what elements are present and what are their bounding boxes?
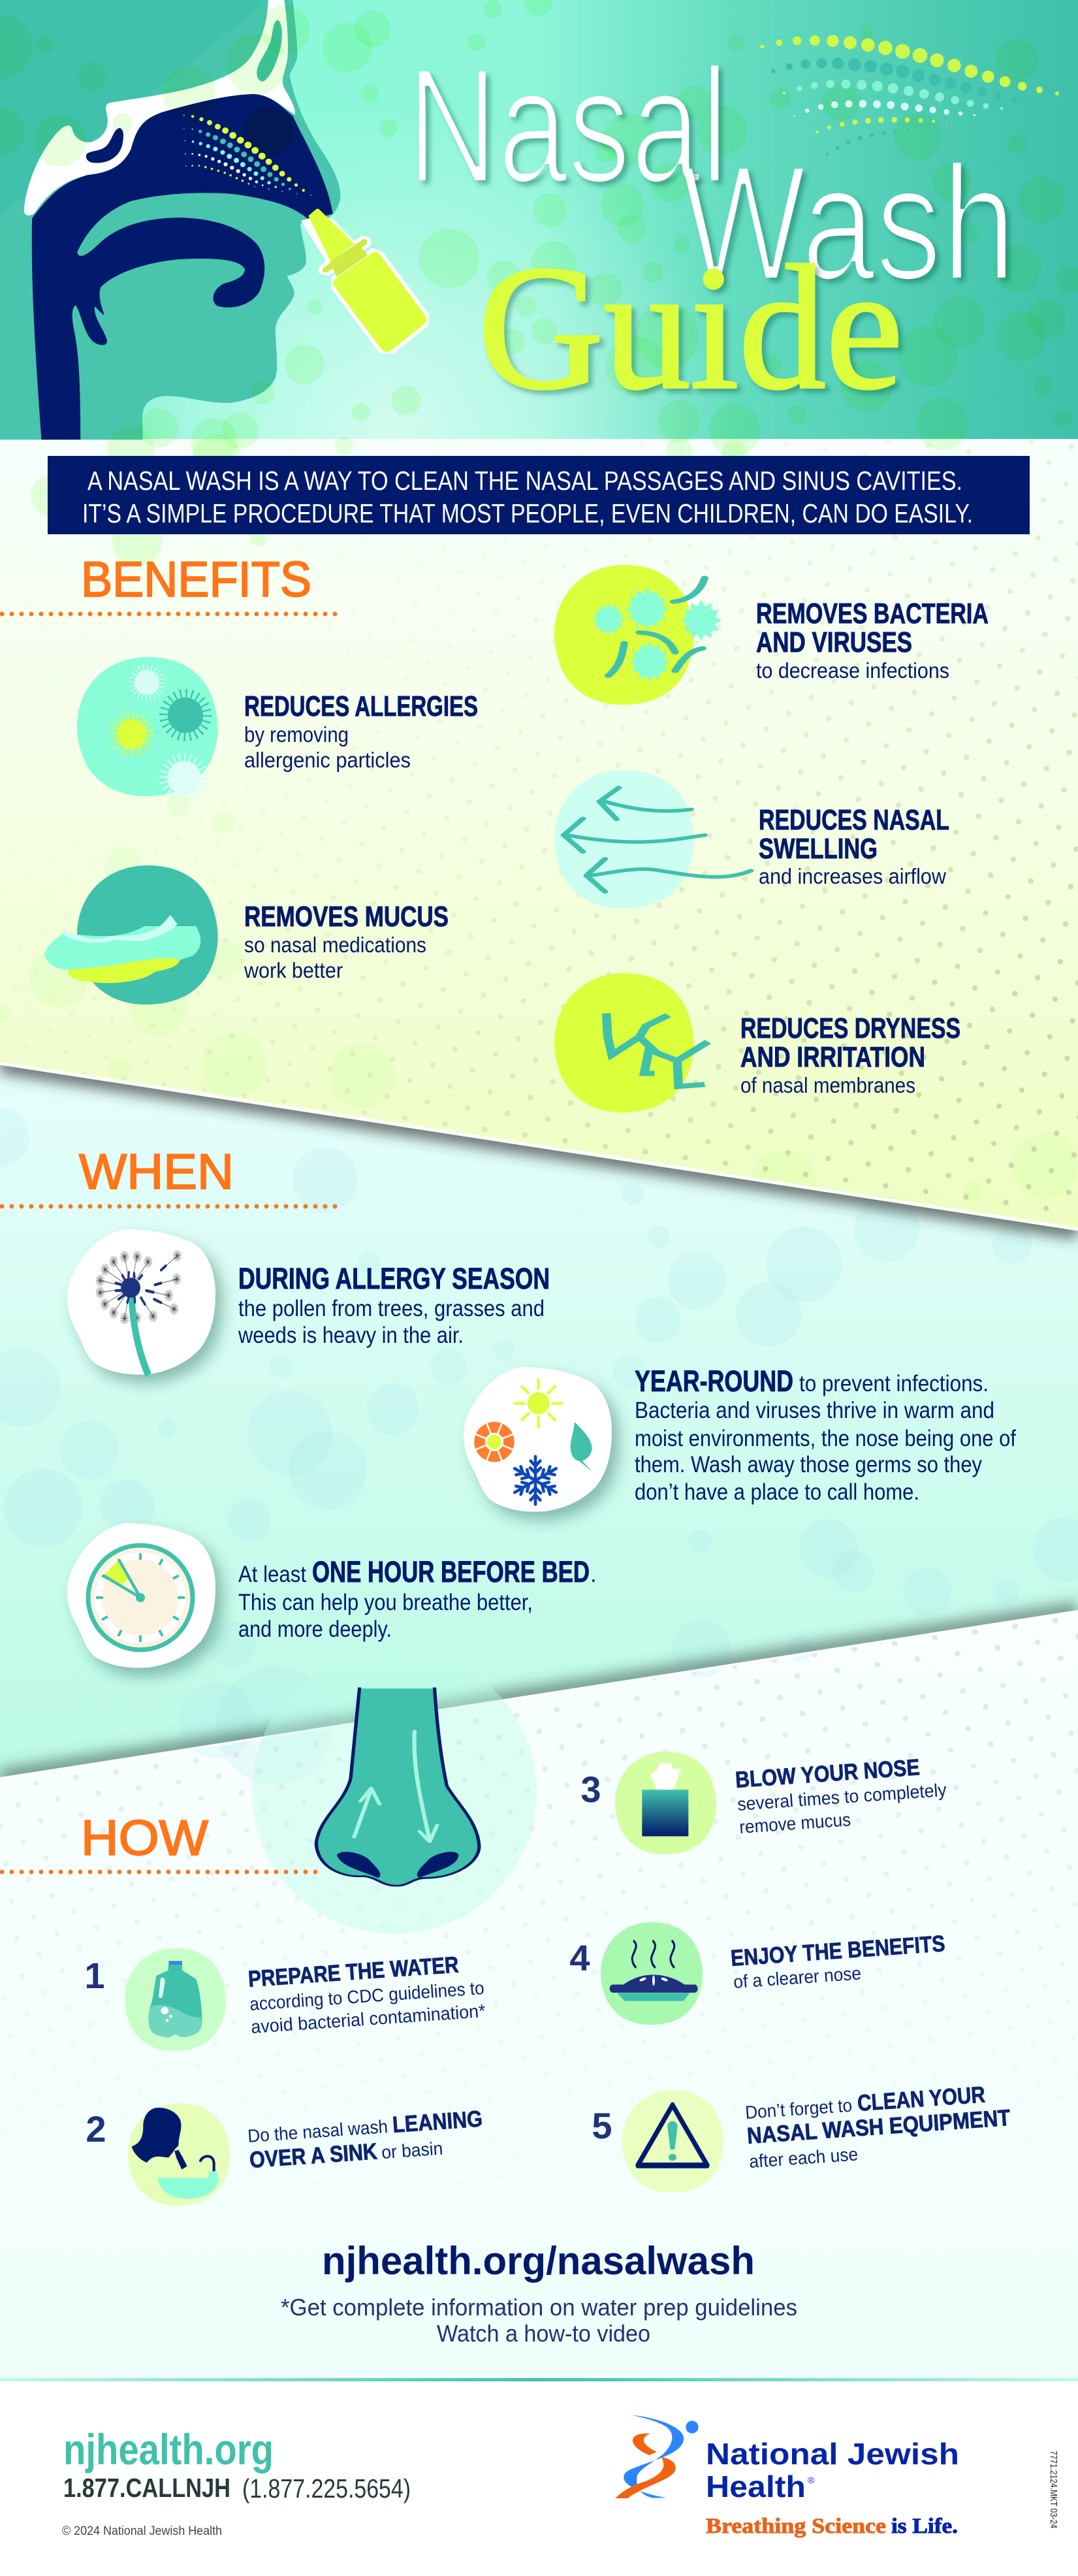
footer contact details <box>62 2425 411 2538</box>
step 2: leaning over a sink: 2 <box>86 2108 106 2149</box>
logo: National Jewish Health <box>615 2415 959 2538</box>
step 5: clean your equipment: Don’t forget to <box>744 2095 853 2123</box>
benefits background bubbles <box>0 794 1077 1216</box>
step 1: prepare the water: avoid bacterial contamination* <box>250 2001 486 2037</box>
logo: National Jewish Health: Breathing Science <box>706 2515 886 2538</box>
benefit: reduces allergies <box>77 657 478 799</box>
step 2: leaning over a sink: OVER A SINK <box>249 2138 378 2173</box>
benefit: removes bacteria and viruses <box>554 565 989 705</box>
when: year-round: YEAR-ROUND <box>635 1364 793 1398</box>
benefit: reduces nasal swelling <box>554 770 949 909</box>
icon: mucus <box>44 865 218 1005</box>
when: year-round <box>464 1364 1016 1512</box>
step 1: prepare the water: 1 <box>84 1955 105 1996</box>
step 1: prepare the water: PREPARE THE WATER <box>247 1952 460 1992</box>
benefit: removes bacteria and viruses: REMOVES BACTERIA <box>756 598 989 630</box>
when: one hour before bed: This can help you breathe better, <box>238 1590 533 1615</box>
when: year-round: them. Wash away those germs so they <box>635 1452 982 1477</box>
flower <box>474 1422 515 1462</box>
snowflake <box>512 1457 559 1504</box>
step 4: enjoy the benefits: 4 <box>569 1937 590 1978</box>
title: Nasal Wash Guide: Guide <box>478 229 903 426</box>
step 2: leaning over a sink: Do the nasal wash <box>247 2116 388 2146</box>
footer contact details: 1.877.CALLNJH <box>63 2473 230 2503</box>
step 2: leaning over a sink <box>86 2103 483 2206</box>
icon: bacteria <box>554 565 721 705</box>
icon: nose with airflow arrows <box>252 1649 537 1934</box>
step 2: leaning over a sink: LEANING <box>392 2106 483 2138</box>
icon: warning triangle <box>622 2090 723 2193</box>
airway <box>32 94 333 440</box>
benefit: removes mucus <box>44 865 449 1005</box>
logo: National Jewish Health: is Life. <box>891 2515 958 2538</box>
head silhouette <box>0 0 340 440</box>
benefit: reduces dryness and irritation: REDUCES DRYNESS <box>740 1012 960 1044</box>
print code: 7771.2124.MKT 03-24 <box>1048 2451 1059 2528</box>
title: Nasal Wash Guide: Nasal <box>407 35 729 216</box>
when: during allergy season: weeds is heavy in the air. <box>238 1323 464 1348</box>
benefit: reduces dryness and irritation: of nasal membranes <box>740 1073 915 1097</box>
icon: person leaning over sink <box>128 2103 230 2206</box>
title: Nasal Wash Guide <box>407 35 1016 426</box>
panel background: when <box>0 1063 1078 1779</box>
logo mark <box>615 2415 699 2498</box>
benefit: reduces nasal swelling: and increases airflow <box>759 864 946 888</box>
step 1: prepare the water: according to CDC guidelines to <box>249 1978 485 2014</box>
logo: National Jewish Health: National Jewish <box>706 2437 959 2471</box>
step 2: leaning over a sink: or basin <box>381 2138 443 2163</box>
illustration: head profile with nasal passage <box>0 0 340 440</box>
when: year-round: don’t have a place to call home. <box>635 1479 919 1505</box>
logo: National Jewish Health: Health <box>706 2470 806 2504</box>
call to action: website: njhealth.org/nasalwash <box>322 2239 755 2283</box>
when: year-round: Bacteria and viruses thrive in warm and <box>635 1398 994 1423</box>
benefit: reduces dryness and irritation <box>554 973 960 1112</box>
when: one hour before bed: and more deeply. <box>238 1617 392 1642</box>
footer contact details: (1.877.225.5654) <box>242 2473 411 2504</box>
when panel edge shadows <box>0 1063 1078 1779</box>
title: Nasal Wash Guide: Wash <box>680 132 1016 314</box>
skull region <box>0 0 268 216</box>
step 3: blow your nose <box>580 1752 947 1854</box>
icon: cracked membrane <box>554 973 708 1112</box>
icon: nasal spray bottle <box>301 209 427 352</box>
page background: benefits zone <box>0 439 1078 1249</box>
step 5: clean your equipment: CLEAN YOUR <box>857 2082 986 2116</box>
icon: dandelion <box>67 1229 215 1375</box>
white sinus band <box>24 0 295 216</box>
sun <box>515 1379 562 1427</box>
footer contact details: njhealth.org <box>63 2425 274 2473</box>
benefit: removes mucus: REMOVES MUCUS <box>244 901 449 933</box>
step 4: enjoy the benefits <box>569 1922 946 2025</box>
decorative dot arcs <box>760 35 1059 156</box>
when: during allergy season: the pollen from trees, grasses and <box>238 1296 545 1321</box>
when: during allergy season <box>67 1229 550 1375</box>
call to action: website: Watch a how-to video <box>437 2320 650 2347</box>
leaf <box>571 1422 592 1472</box>
icon: allergen particles <box>77 657 218 799</box>
step 3: blow your nose: several times to completely <box>737 1780 947 1814</box>
benefit: removes bacteria and viruses: to decrease infections <box>756 658 949 683</box>
benefit: removes bacteria and viruses: AND VIRUSES <box>756 626 912 658</box>
benefit: reduces dryness and irritation: AND IRRITATION <box>740 1041 925 1073</box>
heading: benefits: BENEFITS <box>81 552 311 607</box>
icon: seasons <box>464 1367 612 1512</box>
frontal sinus <box>257 20 282 82</box>
icon: airflow arrows <box>554 770 751 909</box>
call to action: website: *Get complete information on water prep guidelines <box>281 2294 797 2321</box>
when: year-round: moist environments, the nose being one of <box>635 1426 1016 1451</box>
benefit: removes mucus: so nasal medications <box>244 933 426 957</box>
step 5: clean your equipment: NASAL WASH EQUIPMENT <box>746 2105 1011 2149</box>
benefit: reduces nasal swelling: SWELLING <box>759 833 878 865</box>
benefit: removes mucus: work better <box>244 958 343 982</box>
step 4: enjoy the benefits: of a clearer nose <box>733 1963 862 1992</box>
step 5: clean your equipment <box>592 2082 1011 2193</box>
icon: clock <box>67 1523 215 1668</box>
when: during allergy season: DURING ALLERGY SEASON <box>238 1262 550 1295</box>
page background: how zone <box>0 1607 1078 2380</box>
step 3: blow your nose: remove mucus <box>738 1809 851 1837</box>
benefit: reduces allergies: by removing <box>244 722 349 747</box>
header bubbles <box>0 0 1078 566</box>
step 3: blow your nose: 3 <box>580 1769 601 1810</box>
intro banner <box>48 456 1030 534</box>
heading: how: HOW <box>81 1811 208 1866</box>
step 3: blow your nose: BLOW YOUR NOSE <box>735 1754 921 1793</box>
when: one hour before bed: ONE HOUR BEFORE BED <box>312 1555 590 1588</box>
benefit: reduces nasal swelling: REDUCES NASAL <box>759 804 949 836</box>
when background bubbles <box>0 1108 1078 1784</box>
step 4: enjoy the benefits: ENJOY THE BENEFITS <box>730 1931 946 1971</box>
logo: National Jewish Health: ® <box>808 2475 815 2485</box>
when: one hour before bed: . <box>590 1562 597 1587</box>
small sinus curl <box>86 128 123 163</box>
footer contact details: © 2024 National Jewish Health <box>62 2524 222 2538</box>
call to action: website <box>281 2239 797 2347</box>
spray dots <box>183 115 311 196</box>
heading: when: WHEN <box>79 1144 234 1200</box>
benefit: reduces allergies: REDUCES ALLERGIES <box>244 690 478 722</box>
header banner background <box>0 0 1078 439</box>
when: one hour before bed: At least <box>238 1562 306 1587</box>
icon: tissue box <box>615 1752 716 1854</box>
step 1: prepare the water <box>84 1948 486 2051</box>
when: year-round: to prevent infections. <box>799 1371 989 1396</box>
footer background <box>0 2380 1078 2576</box>
when: one hour before bed <box>67 1523 597 1668</box>
benefit: reduces allergies: allergenic particles <box>244 748 411 772</box>
icon: water jug <box>125 1948 226 2051</box>
step 5: clean your equipment: after each use <box>748 2144 859 2172</box>
step 5: clean your equipment: 5 <box>592 2105 612 2146</box>
icon: steaming pie <box>601 1922 703 2025</box>
